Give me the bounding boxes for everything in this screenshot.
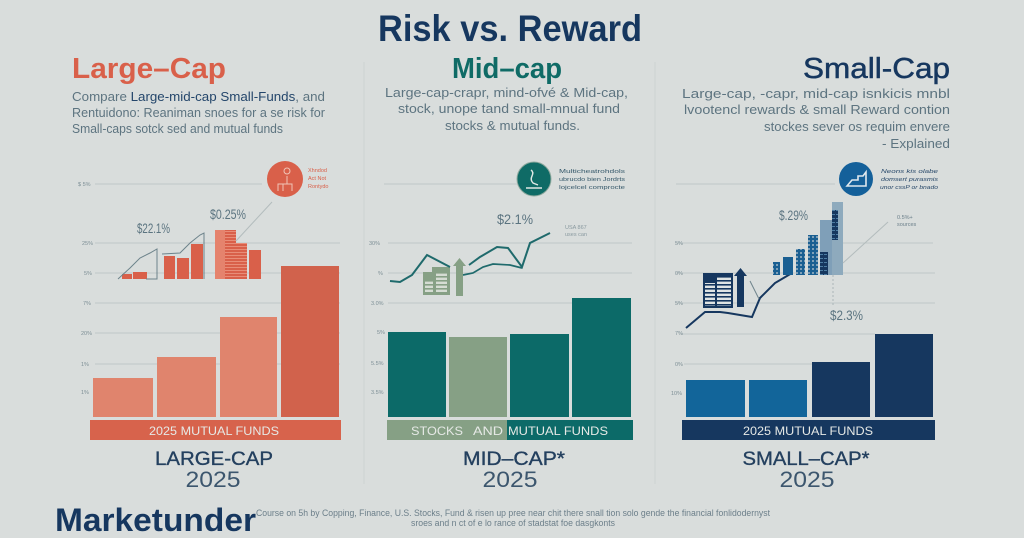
mid-cap icon note: Multicheatrohdols <box>559 169 625 175</box>
large-cap chart grid: 25% <box>82 241 93 247</box>
mid-cap chart grid: 5.5% <box>371 361 384 367</box>
mid-cap chart grid: 3.5% <box>371 390 384 396</box>
footer note <box>256 508 770 528</box>
small-cap chart note: 0.5%+ <box>897 215 913 221</box>
mid-cap mini chart <box>390 233 550 296</box>
large-cap chart grid: 1% <box>81 362 89 368</box>
large-cap mini chart <box>118 202 272 279</box>
small-cap description: Large-cap, -capr, mid-cap isnkicis mnbl <box>682 86 950 101</box>
large-cap chart grid: 7% <box>83 301 91 307</box>
large-cap description <box>72 89 326 136</box>
small-cap footer label: 2025 <box>780 467 834 492</box>
small-cap icon note: domsert purasmis <box>881 177 938 183</box>
small-cap chart grid: 7% <box>675 331 683 337</box>
large-cap value labels: $22.1% <box>137 220 170 236</box>
small-cap icon note <box>880 169 938 191</box>
brand name: Marketunder <box>55 502 256 538</box>
small-cap chart grid: 5% <box>675 241 683 247</box>
mid-cap chart note: uses can <box>565 232 587 238</box>
mid-cap description <box>385 85 628 133</box>
mid-cap footer label <box>463 449 566 492</box>
small-cap footer label: SMALL–CAP* <box>742 449 870 470</box>
mid-cap description: Large-cap-crapr, mind-ofvé & Mid-cap, <box>385 85 628 100</box>
mid-cap icon note <box>559 169 625 191</box>
large-cap chart grid: $ 5% <box>78 182 91 188</box>
small-cap footer label <box>742 449 870 492</box>
small-cap chart note <box>897 215 917 228</box>
mid-cap value label: $2.1% <box>497 211 533 227</box>
title: Risk vs. Reward <box>378 8 642 49</box>
mid-cap band: MUTUAL FUNDS <box>508 424 608 438</box>
large-cap band <box>90 420 341 440</box>
heading: small-cap: Small-Cap <box>803 53 950 85</box>
small-cap icon note: Neons kis olabe <box>881 169 938 175</box>
panel: large-cap <box>72 53 341 492</box>
mid-cap band: AND <box>473 424 503 438</box>
heading: mid-cap: Mid–cap <box>452 53 562 85</box>
small-cap value label 2: $2.3% <box>830 307 863 323</box>
mid-cap description: stocks & mutual funds. <box>445 118 580 133</box>
small-cap description: stockes sever os requim envere <box>764 119 950 134</box>
mid-cap chart grid: 3.0% <box>371 301 384 307</box>
large-cap bars <box>93 266 339 417</box>
mid-cap bars <box>388 298 631 417</box>
small-cap chart grid: 5% <box>675 301 683 307</box>
small-cap chart note: sources <box>897 222 917 228</box>
mid-cap chart grid: % <box>378 271 383 277</box>
small-cap description <box>682 86 950 151</box>
icon: mid-cap circle <box>517 162 551 196</box>
large-cap footer label: 2025 <box>186 467 240 492</box>
mid-cap footer label: MID–CAP* <box>463 449 566 470</box>
mid-cap chart grid <box>369 184 632 396</box>
large-cap description: Rentuidono: Reaniman snoes for a se risk for <box>72 105 326 120</box>
mid-cap chart note <box>565 225 587 238</box>
large-cap icon note: Rontydo <box>308 184 328 190</box>
small-cap chart grid: 10% <box>671 391 682 397</box>
footer note: sroes and n ct of e lo rance of stadstat foe dasgkonts <box>411 518 615 528</box>
heading: large-cap: Large–Cap <box>72 53 226 85</box>
large-cap footer label: LARGE-CAP <box>155 449 273 470</box>
panel: mid-cap <box>369 53 633 492</box>
large-cap chart grid: 1% <box>81 390 89 396</box>
small-cap icon note: unor cssP or bnado <box>880 185 938 191</box>
small-cap description: - Explained <box>882 136 950 151</box>
large-cap icon note: Xhndod <box>308 168 327 174</box>
small-cap mini chart <box>686 202 888 328</box>
large-cap icon note: Act Not <box>308 176 327 182</box>
mid-cap chart grid: 5% <box>377 330 385 336</box>
mid-cap band <box>387 420 633 440</box>
large-cap chart grid: 20% <box>81 331 92 337</box>
large-cap band: 2025 MUTUAL FUNDS <box>149 424 279 438</box>
mid-cap band: STOCKS <box>411 424 463 438</box>
mid-cap chart note: USA 867 <box>565 225 587 231</box>
small-cap description: lvootencl rewards & small Reward contion <box>684 102 950 117</box>
small-cap band <box>682 420 935 440</box>
small-cap chart grid: 0% <box>675 271 683 277</box>
large-cap description: Small-caps sotck sed and mutual funds <box>72 121 283 136</box>
mid-cap footer label: 2025 <box>482 467 538 492</box>
small-cap chart grid: 0% <box>675 362 683 368</box>
mid-cap description: stock, unope tand small-mnual fund <box>398 101 620 116</box>
large-cap footer label <box>155 449 273 492</box>
panel: small-cap <box>671 53 950 492</box>
large-cap icon note <box>308 168 328 190</box>
large-cap value label 2: $0.25% <box>210 206 246 222</box>
small-cap chart grid <box>671 184 935 397</box>
icon: small-cap circle <box>839 162 873 196</box>
small-cap band: 2025 MUTUAL FUNDS <box>743 424 873 438</box>
mid-cap chart grid: 30% <box>369 241 380 247</box>
mid-cap icon note: ubrucdo bien Jordrts <box>559 177 625 183</box>
footer note: Course on 5h by Copping, Finance, U.S. Stocks, Fund & risen up pree near chit there snall tion solo gende the financial fonlidodernyst <box>256 508 770 518</box>
large-cap chart grid <box>78 182 340 396</box>
large-cap chart grid: 5% <box>84 271 92 277</box>
small-cap bars <box>686 334 933 417</box>
icon: large-cap circle <box>267 161 303 197</box>
large-cap description: Compare Large-mid-cap Small-Funds , and <box>72 89 325 104</box>
small-cap value label: $.29% <box>779 207 808 223</box>
mid-cap icon note: lojcelcel comprocte <box>559 185 625 191</box>
